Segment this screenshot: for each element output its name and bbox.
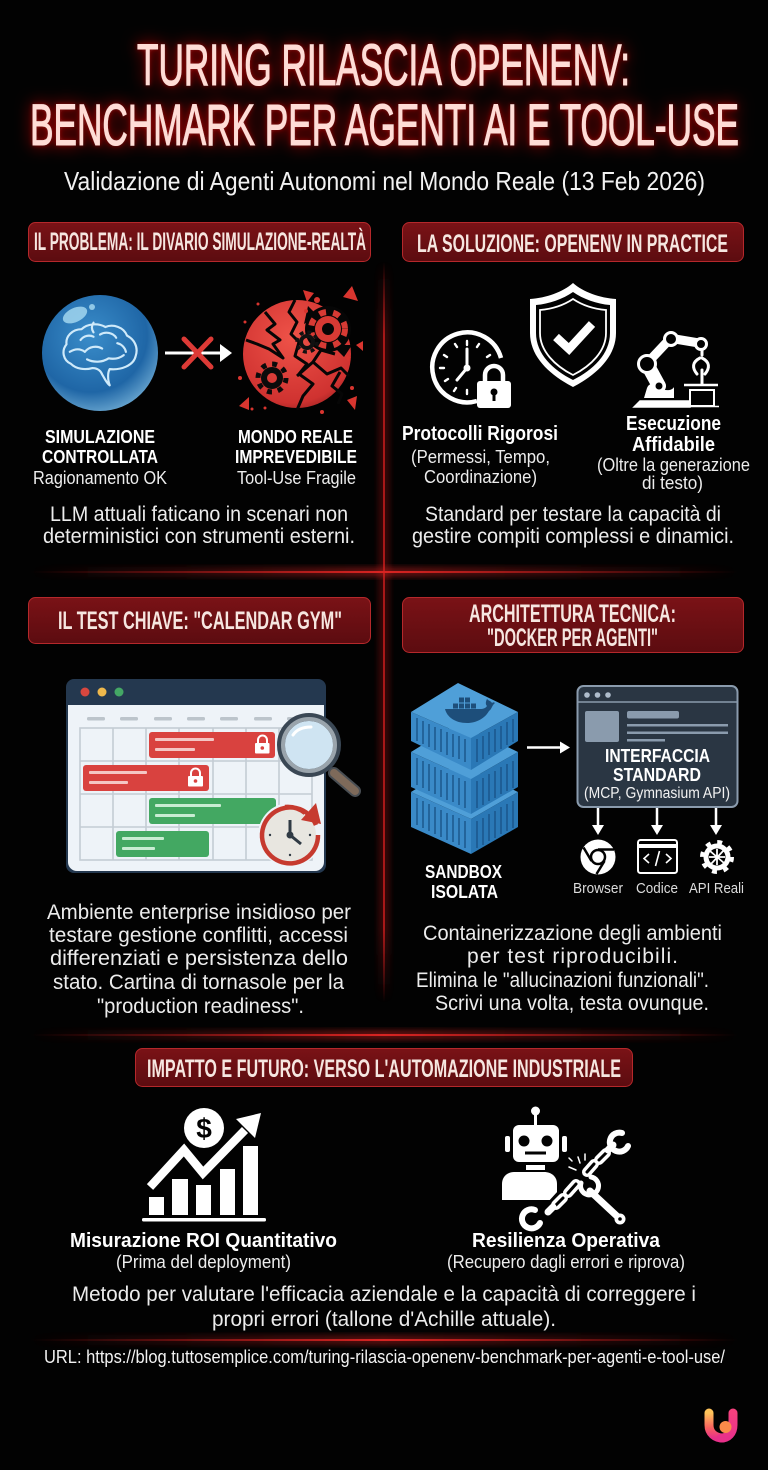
label: mondo reale imprevedibile: Tool-Use Fragile <box>237 467 356 488</box>
panel: interfaccia standard: (MCP, Gymnasium API) <box>584 785 730 802</box>
label: misurazione ROI: (Prima del deployment) <box>116 1251 291 1272</box>
icon: shield <box>530 283 616 387</box>
labels: tools: Codice <box>636 881 678 897</box>
label: simulazione controllata: Ragionamento OK <box>33 467 168 488</box>
text: impact description: Metodo per valutare l'efficacia aziendale e la capacità di correggere i <box>72 1283 696 1306</box>
label: esecuzione affidabile: Esecuzione <box>626 413 721 435</box>
icon: cracked red sphere <box>238 286 363 414</box>
text: soluzione description: Standard per testare la capacità di <box>425 503 721 526</box>
label: mondo reale imprevedibile: IMPREVEDIBILE <box>235 447 357 467</box>
text: problema description <box>43 503 355 548</box>
icon: robot with broken chain and wrenches <box>502 1106 628 1228</box>
text: soluzione description <box>412 503 734 548</box>
heading: calendar gym <box>28 598 370 644</box>
labels: tools: Browser <box>573 881 623 897</box>
text: architecture description: per test riproducibili. <box>467 945 678 968</box>
icon: clock with refresh arrow <box>258 803 322 867</box>
text: calendar description: Ambiente enterprise insidioso per <box>47 901 351 924</box>
icon: ROI chart: $ <box>196 1113 212 1144</box>
label: mondo reale imprevedibile <box>235 427 357 488</box>
panel: la soluzione <box>402 222 750 548</box>
label: resilienza operativa: Resilienza Operativa <box>472 1229 661 1252</box>
arrow: broken link <box>165 339 232 367</box>
panel: interfaccia standard: STANDARD <box>613 765 701 785</box>
text: calendar description <box>47 901 351 1018</box>
text: impact description <box>72 1283 696 1331</box>
label: esecuzione affidabile <box>597 413 750 493</box>
panel: architettura tecnica <box>402 598 744 1015</box>
label: resilienza operativa <box>447 1229 685 1272</box>
panel: il problema <box>28 222 370 548</box>
text: architecture description <box>416 922 722 1015</box>
label: protocolli rigorosi: (Permessi, Tempo, <box>411 446 550 467</box>
logo <box>709 1413 733 1438</box>
text: calendar description: stato. Cartina di tornasole per la <box>53 971 344 994</box>
label: simulazione controllata: CONTROLLATA <box>42 447 158 467</box>
label: esecuzione affidabile: (Oltre la generazione <box>597 454 750 475</box>
text: problema description: LLM attuali faticano in scenari non <box>50 503 348 526</box>
label: protocolli rigorosi: Coordinazione) <box>424 466 537 487</box>
label: sandbox isolata: SANDBOX <box>425 862 502 882</box>
icon: magnifying glass <box>281 717 355 791</box>
label: simulazione controllata <box>33 427 168 488</box>
icon: browser <box>580 840 616 874</box>
label: esecuzione affidabile: di testo) <box>642 472 703 493</box>
label: sandbox isolata <box>425 862 502 902</box>
label: resilienza operativa: (Recupero dagli errori e riprova) <box>447 1251 685 1272</box>
heading: il problema: IL PROBLEMA: IL DIVARIO SIMULAZIONE-REALTÀ <box>34 227 366 256</box>
illustration: calendar window <box>66 679 326 873</box>
label: protocolli rigorosi: Protocolli Rigorosi <box>402 423 558 445</box>
icon: stacked docker containers <box>411 683 518 854</box>
dividers <box>30 262 738 1345</box>
icon: gear api <box>702 842 732 872</box>
icon: robot arm <box>634 332 719 407</box>
heading: calendar gym: IL TEST CHIAVE: "CALENDAR GYM" <box>58 607 342 635</box>
heading: la soluzione <box>402 222 744 262</box>
text: calendar description: "production readiness". <box>97 995 304 1018</box>
text: impact description: propri errori (tallone d'Achille attuale). <box>212 1308 556 1331</box>
labels: tools: API Reali <box>689 881 744 897</box>
text: calendar description: testare gestione conflitti, accessi <box>49 924 348 947</box>
label: misurazione ROI <box>70 1229 337 1272</box>
text: architecture description: Containerizzazione degli ambienti <box>423 922 722 945</box>
icon: clock with lock <box>432 332 511 408</box>
panel: impatto e futuro <box>70 1048 696 1331</box>
label: simulazione controllata: SIMULAZIONE <box>45 427 155 447</box>
title <box>30 33 739 158</box>
heading: il problema <box>28 222 370 262</box>
text: architecture description: Scrivi una volta, testa ovunque. <box>435 992 709 1015</box>
heading: architettura tecnica <box>402 598 744 652</box>
panel: interfaccia standard <box>578 686 738 807</box>
label: esecuzione affidabile: Affidabile <box>632 434 715 456</box>
label: misurazione ROI: Misurazione ROI Quantitativo <box>70 1229 337 1252</box>
label: sandbox isolata: ISOLATA <box>431 882 498 902</box>
text: calendar description: differenziati e persistenza dello <box>50 947 348 970</box>
labels: tools <box>573 881 744 897</box>
label: protocolli rigorosi <box>402 423 558 487</box>
arrows: interface to tools <box>592 808 722 835</box>
label: mondo reale imprevedibile: MONDO REALE <box>238 427 353 447</box>
text: problema description: deterministici con strumenti esterni. <box>43 525 355 548</box>
icon: blue sphere with brain <box>42 295 158 411</box>
text: architecture description: Elimina le "allucinazioni funzionali". <box>416 969 709 992</box>
panel: interfaccia standard: INTERFACCIA <box>605 746 710 766</box>
icon: code window <box>638 840 677 873</box>
source URL: URL: https://blog.tuttosemplice.com/turing-rilascia-openenv-benchmark-per-agenti-e-tool-use/ <box>44 1347 725 1367</box>
panel: calendar gym <box>28 598 370 1018</box>
heading: impatto e futuro <box>136 1048 632 1086</box>
arrow: sandbox to interface <box>527 742 570 754</box>
icon: ROI chart <box>142 1108 266 1222</box>
text: soluzione description: gestire compiti complessi e dinamici. <box>412 525 734 548</box>
